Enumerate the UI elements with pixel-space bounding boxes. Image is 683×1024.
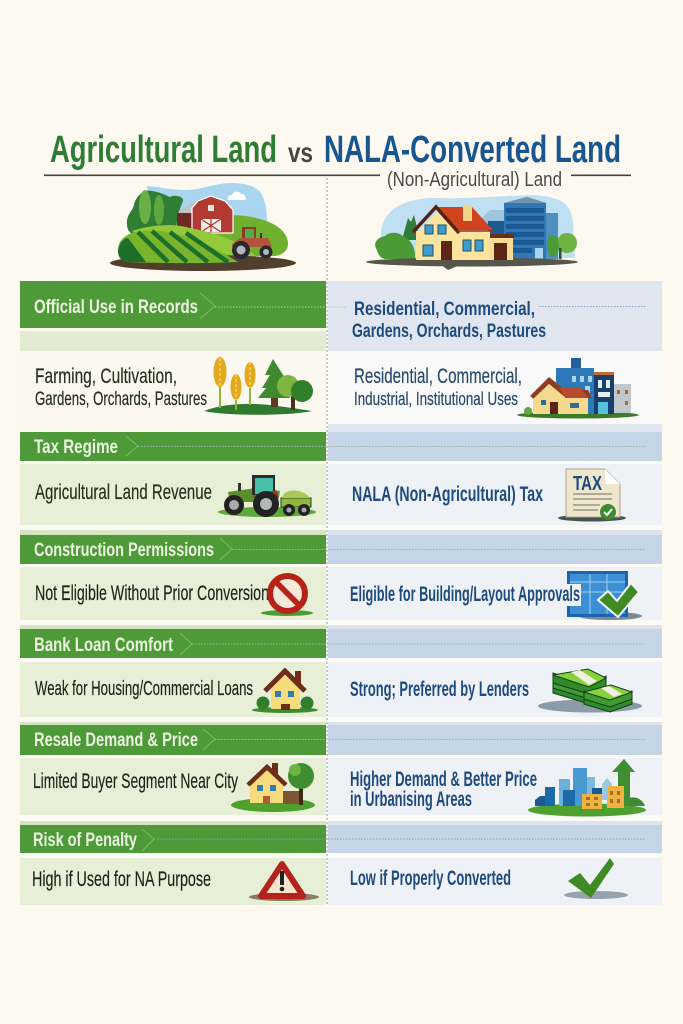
right header background (328, 281, 662, 351)
panel: resale demand and price: Limited Buyer Segment Near City (33, 770, 238, 793)
heading: Official Use in Records (34, 297, 198, 318)
icon: house with tree (231, 763, 315, 812)
left text: Farming, Cultivation, (35, 365, 177, 388)
panel: tax regime: NALA (Non-Agricultural) Tax (352, 483, 543, 506)
subtitle: (Non-Agricultural) Land (387, 169, 562, 191)
right text (354, 365, 522, 409)
icon: tractor with trailer (218, 475, 316, 517)
panel: risk of penalty: High if Used for NA Purpose (32, 868, 211, 891)
title: Agricultural Land (50, 129, 277, 171)
panel: risk of penalty: Low if Properly Converted (350, 867, 511, 890)
panel: resale demand and price: in Urbanising Areas (350, 788, 472, 811)
left header (20, 281, 326, 328)
panel: construction permissions: Construction Permissions (34, 540, 214, 561)
icon: small house (252, 671, 318, 713)
panel: bank loan comfort: Strong; Preferred by Lenders (350, 678, 529, 701)
title (50, 129, 621, 171)
right heading text: Gardens, Orchards, Pastures (352, 321, 546, 342)
icon: city buildings (517, 358, 639, 418)
icon: stacks of money (538, 669, 642, 712)
icon: skyline with growth arrow (528, 759, 646, 816)
icon: check mark (564, 858, 628, 899)
icon: crops and trees (204, 357, 313, 415)
icon: blueprint with check (565, 571, 642, 620)
icon: tax document (558, 469, 626, 522)
panel: resale demand and price: Higher Demand & Better Price (350, 768, 537, 791)
center divider (326, 178, 328, 906)
icon: tax document: TAX (573, 473, 602, 495)
panel: risk of penalty: Risk of Penalty (33, 830, 137, 851)
panel: risk of penalty (20, 821, 662, 905)
illustration: city and house (366, 195, 578, 270)
panel: tax regime: Agricultural Land Revenue (35, 481, 212, 504)
green strip (20, 331, 326, 351)
right text: Industrial, Institutional Uses (354, 389, 518, 409)
panel: bank loan comfort: Weak for Housing/Commercial Loans (35, 678, 253, 700)
icon: warning triangle (249, 864, 319, 901)
right heading text (352, 299, 546, 342)
panel: tax regime (20, 424, 662, 525)
title rule (44, 174, 631, 176)
panel: construction permissions (20, 530, 662, 620)
right text: Residential, Commercial, (354, 365, 522, 388)
left text (35, 365, 207, 410)
icon: prohibition sign (261, 576, 313, 616)
panel: construction permissions: Not Eligible Without Prior Conversion (35, 582, 269, 605)
panel: bank loan comfort: Bank Loan Comfort (34, 635, 174, 656)
left text: Gardens, Orchards, Pastures (35, 389, 207, 410)
right heading text: Residential, Commercial, (354, 299, 535, 320)
panel: row 1 (20, 351, 662, 424)
panel: official use in records (20, 281, 662, 351)
title: vs (288, 137, 313, 168)
panel: resale demand and price: Resale Demand & Price (34, 730, 198, 751)
illustration: farm (110, 183, 296, 271)
panel: bank loan comfort (20, 625, 662, 717)
panel: tax regime: Tax Regime (34, 437, 118, 458)
panel: resale demand and price (20, 722, 662, 816)
